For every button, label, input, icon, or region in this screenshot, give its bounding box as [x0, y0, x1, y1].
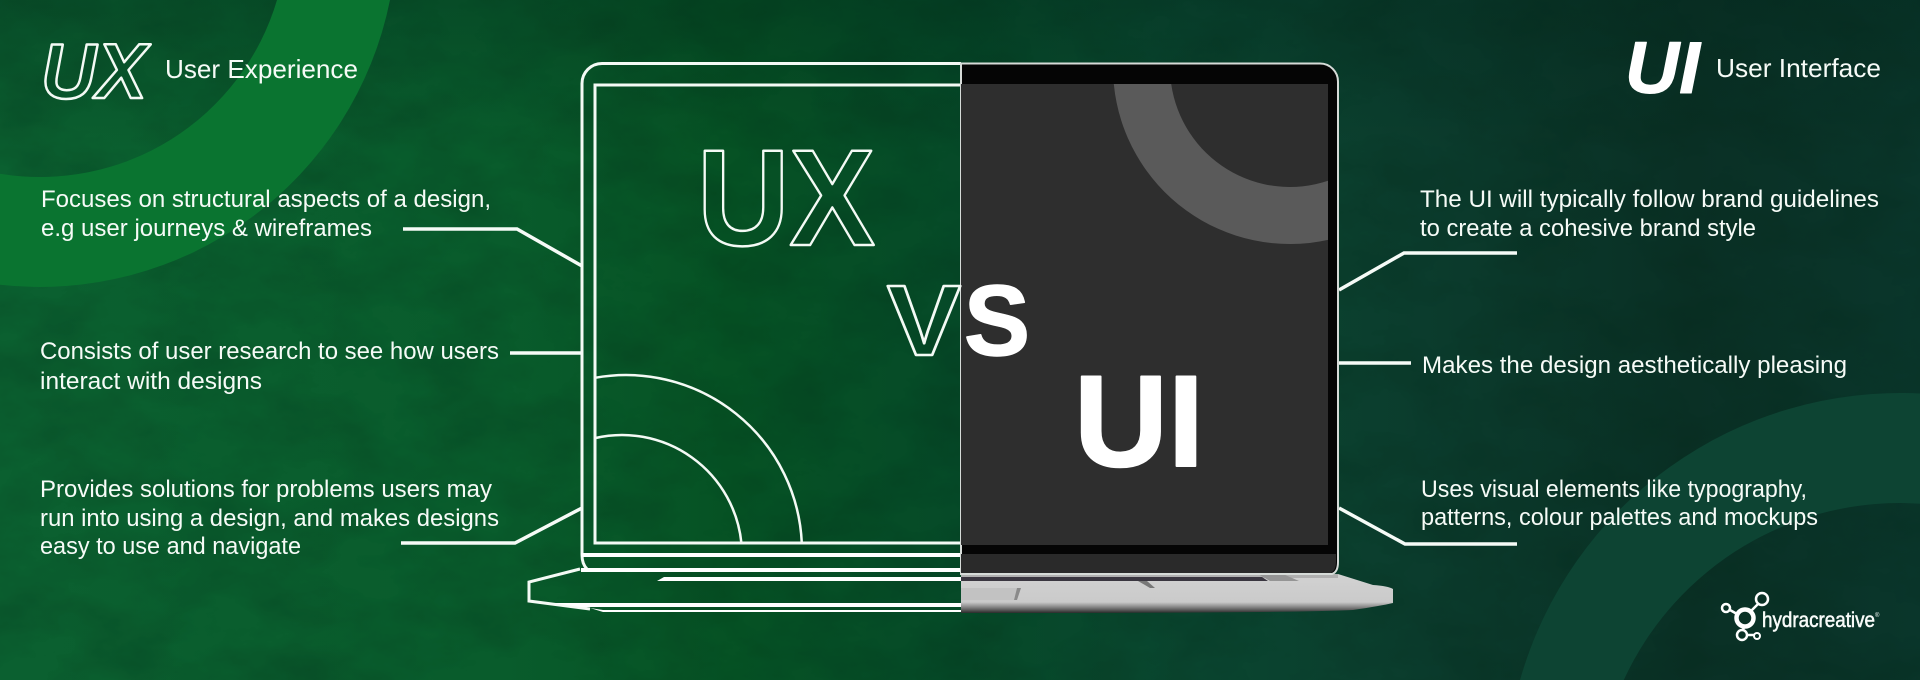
laptop: UI realistic half: [961, 64, 1393, 613]
V outlined: V: [887, 265, 961, 377]
silver base: [961, 574, 1393, 613]
logo wordmark: hydracreative: [1762, 609, 1875, 632]
screen: [961, 84, 1328, 545]
screen arcs: [595, 375, 802, 543]
S solid: S: [964, 265, 1030, 377]
UX point 2: Consists of user research to see how users: [40, 338, 499, 365]
connector lines: UI side: [1339, 253, 1517, 544]
UI point 1: The UI will typically follow brand guidelines: [1420, 186, 1879, 213]
keyboard strip: [961, 574, 1338, 600]
UI subtitle: User Interface: [1716, 53, 1881, 83]
UX point 1: Focuses on structural aspects of a design,: [41, 186, 491, 213]
VS: [887, 265, 1030, 377]
connector lines: UX side: [401, 229, 582, 543]
lid outline: [582, 64, 961, 569]
large solid UI: UI: [1074, 348, 1204, 494]
hydracreative logo: [1722, 593, 1880, 640]
screen outline: [595, 85, 961, 543]
UI point 1: to create a cohesive brand style: [1420, 215, 1756, 242]
background ring: top left: [0, 0, 390, 287]
UX point 1: e.g user journeys & wireframes: [41, 215, 372, 242]
base lines: [553, 553, 961, 612]
UX point 3: Provides solutions for problems users may: [40, 476, 492, 503]
lid frame: [961, 64, 1338, 574]
laptop: UX wireframe half: [529, 64, 961, 612]
lower lid: [961, 554, 1336, 573]
UX subtitle: User Experience: [165, 54, 358, 84]
registered mark: ®: [1875, 612, 1880, 619]
background ring: bottom right: [1520, 393, 1920, 680]
UI point 2: Makes the design aesthetically pleasing: [1422, 352, 1847, 379]
UX outlined logo: UX: [41, 27, 151, 115]
UX point 3: easy to use and navigate: [40, 533, 301, 560]
heading: UX User Experience: [41, 27, 358, 115]
UI point 3: Uses visual elements like typography,: [1421, 476, 1807, 503]
UI solid logo: UI: [1625, 28, 1702, 109]
UX point 3: run into using a design, and makes designs: [40, 505, 499, 532]
base outline: [529, 569, 590, 609]
heading: UI User Interface: [1625, 28, 1881, 109]
large outlined UX: UX: [697, 122, 875, 275]
screen ring: [1114, 84, 1328, 244]
UX point 2: interact with designs: [40, 368, 262, 395]
UI point 3: patterns, colour palettes and mockups: [1421, 504, 1818, 531]
logo icon: [1722, 593, 1768, 640]
